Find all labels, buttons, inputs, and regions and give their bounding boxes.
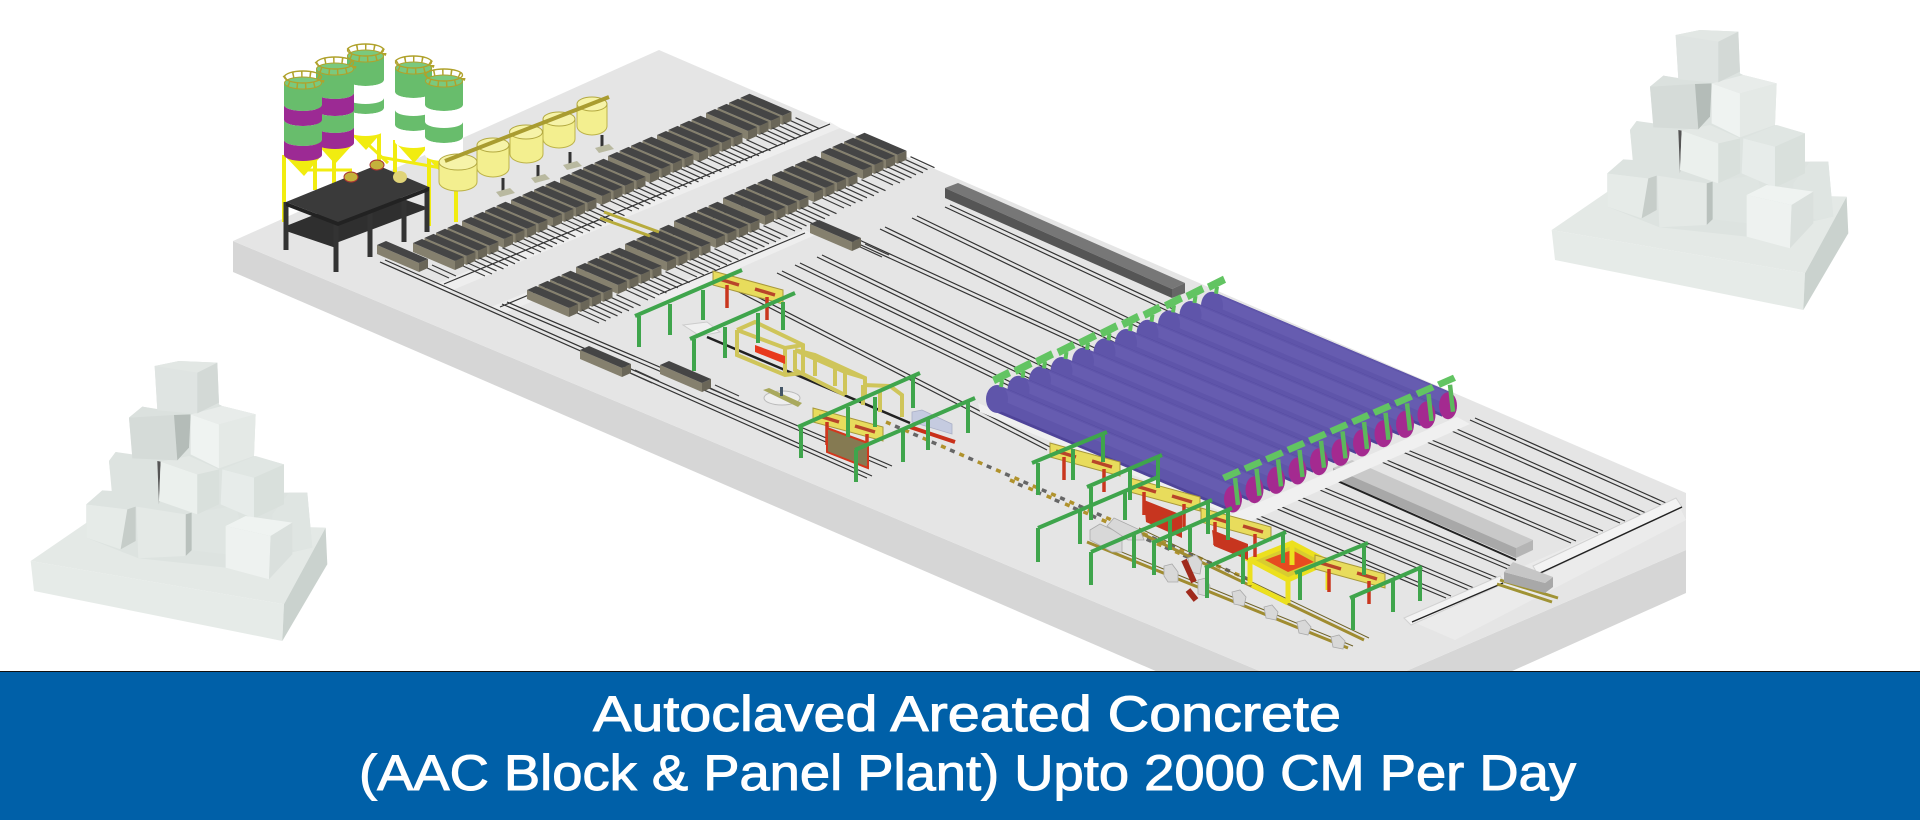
yellow mixer tanks [439, 97, 614, 222]
banner title line two: (AAC Block & Panel Plant) Upto 2000 CM Per Day [359, 745, 1576, 801]
black service platform [286, 160, 429, 272]
cake block on red track [910, 410, 955, 442]
title banner [0, 671, 1920, 820]
kerb strip with cart [1404, 498, 1682, 625]
autoclave base strips [978, 403, 1470, 526]
silo three [347, 44, 384, 136]
silo one [284, 71, 322, 161]
single moulds on track [377, 212, 889, 398]
packing track with block stacks [1087, 518, 1369, 649]
block pile: right [1552, 30, 1848, 310]
silo five [425, 69, 463, 161]
silo legs and bracing [284, 130, 463, 226]
banner title line one: Autoclaved Areated Concrete [593, 686, 1341, 742]
mould row one [413, 94, 820, 276]
silo four [395, 56, 432, 148]
storage blocks row: light [1333, 460, 1533, 560]
floor rails [380, 124, 1666, 598]
silo two [316, 57, 354, 149]
turntable [763, 387, 802, 407]
autoclaves [986, 276, 1457, 512]
block pile: left [31, 361, 327, 641]
cutting line gold frames [737, 322, 902, 417]
black transfer track [707, 337, 910, 423]
green overhead gantries [635, 270, 1422, 630]
roller marks [886, 422, 1250, 580]
plant floor platform [233, 50, 1686, 672]
yellow stacking gantry [1250, 543, 1328, 603]
mould row two [527, 133, 934, 323]
storage blocks row: dark [945, 183, 1185, 298]
gold transfer cranes [713, 271, 1385, 604]
